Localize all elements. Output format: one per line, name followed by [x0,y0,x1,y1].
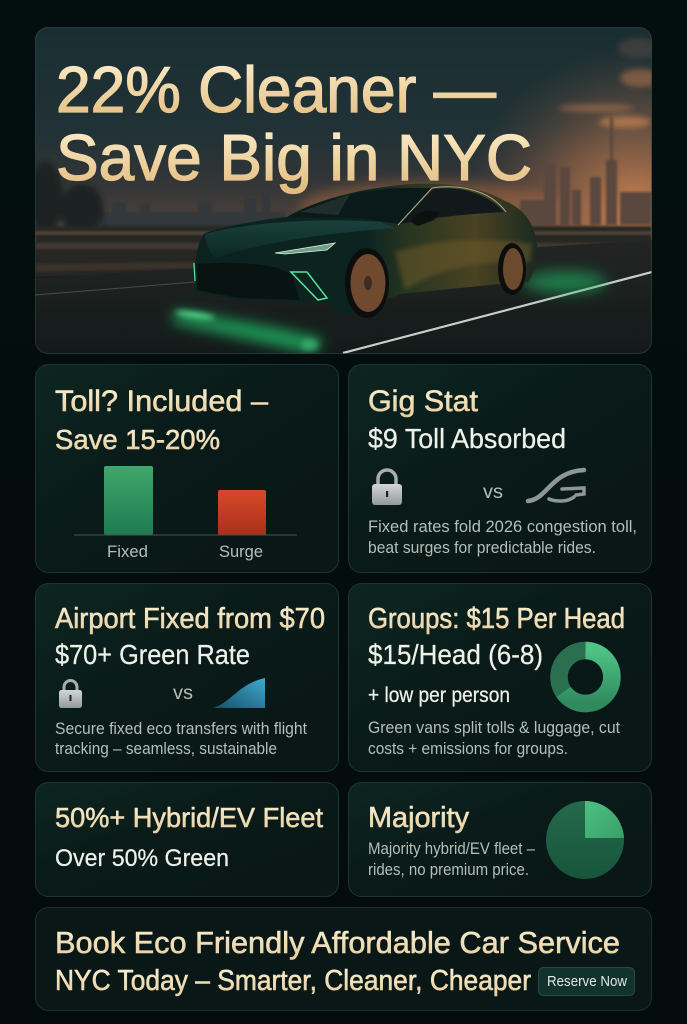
rear wheel [498,243,526,295]
stat: $70+ Green Rate [55,639,250,670]
title: Save Big in NYC [56,121,532,194]
stat: $15/Head (6-8) [368,639,543,670]
stat: Over 50% Green [55,845,229,872]
dark trees [35,161,107,228]
icon: blue wave [213,678,265,708]
description [368,718,620,758]
description: tracking – seamless, sustainable [55,739,277,758]
icon: padlock [59,681,82,708]
heading [55,385,268,455]
panel: toll included [36,364,338,572]
hood shine [205,220,394,254]
car body [195,184,537,316]
heading: Majority [368,802,469,834]
panel: majority [348,782,652,896]
panel: gig stat [348,364,652,572]
city skyline [100,117,652,228]
icon: padlock [372,470,402,505]
hero background: dusk sky [35,27,652,242]
description: Secure fixed eco transfers with flight [55,719,307,738]
cta headline [55,925,620,997]
heading: Save 15-20% [55,424,220,455]
description [368,840,536,879]
horizon glow [296,174,558,212]
green glow under car [172,271,607,352]
cta headline: Book Eco Friendly Affordable Car Service [55,925,620,960]
car illustration [194,184,537,318]
front grille [197,263,300,300]
panel: hybrid EV fleet [36,782,338,896]
cta headline: NYC Today – Smarter, Cleaner, Cheaper [55,965,531,997]
panel: hero banner [27,27,660,354]
button: reserve now [538,968,634,996]
vs label: vs [173,683,193,704]
description: beat surges for predictable rides. [368,538,596,557]
highway guard rail [35,226,652,278]
bar chart: fixed vs surge: Fixed [107,542,148,561]
title [56,53,532,194]
bar chart: fixed vs surge: Surge [219,542,263,561]
donut chart [559,650,612,704]
description: Majority hybrid/EV fleet – [368,840,536,858]
pie chart [546,801,624,879]
heading: Airport Fixed from $70 [55,603,325,635]
front wheel [345,248,389,318]
bar chart: fixed vs surge [74,466,297,561]
road surface [35,240,652,354]
stat: $9 Toll Absorbed [368,423,566,454]
description: Green vans split tolls & luggage, cut [368,718,620,737]
heading: Toll? Included – [55,385,268,418]
headlight [275,243,335,254]
heading: Gig Stat [368,385,479,418]
car side highlight [395,240,532,290]
hero border [36,28,652,354]
description [55,719,307,758]
description: Fixed rates fold 2026 congestion toll, [368,517,637,536]
vs label: vs [483,482,503,503]
description: rides, no premium price. [368,861,529,879]
sub stat: + low per person [368,684,510,707]
road lane lines [35,272,652,353]
description: costs + emissions for groups. [368,739,568,758]
heading: Groups: $15 Per Head [368,603,625,635]
heading: 50%+ Hybrid/EV Fleet [55,802,323,833]
title: 22% Cleaner — [56,53,496,126]
description [368,517,637,557]
icon: surge curve [528,470,584,501]
panel: call to action [36,908,652,1010]
windows [287,188,432,224]
button: reserve now: Reserve Now [547,973,627,990]
side mirror [411,211,440,226]
green LED accents [291,272,327,300]
panel: airport fixed [36,584,338,772]
panel: group rates [348,584,652,772]
sunset clouds [558,38,660,128]
